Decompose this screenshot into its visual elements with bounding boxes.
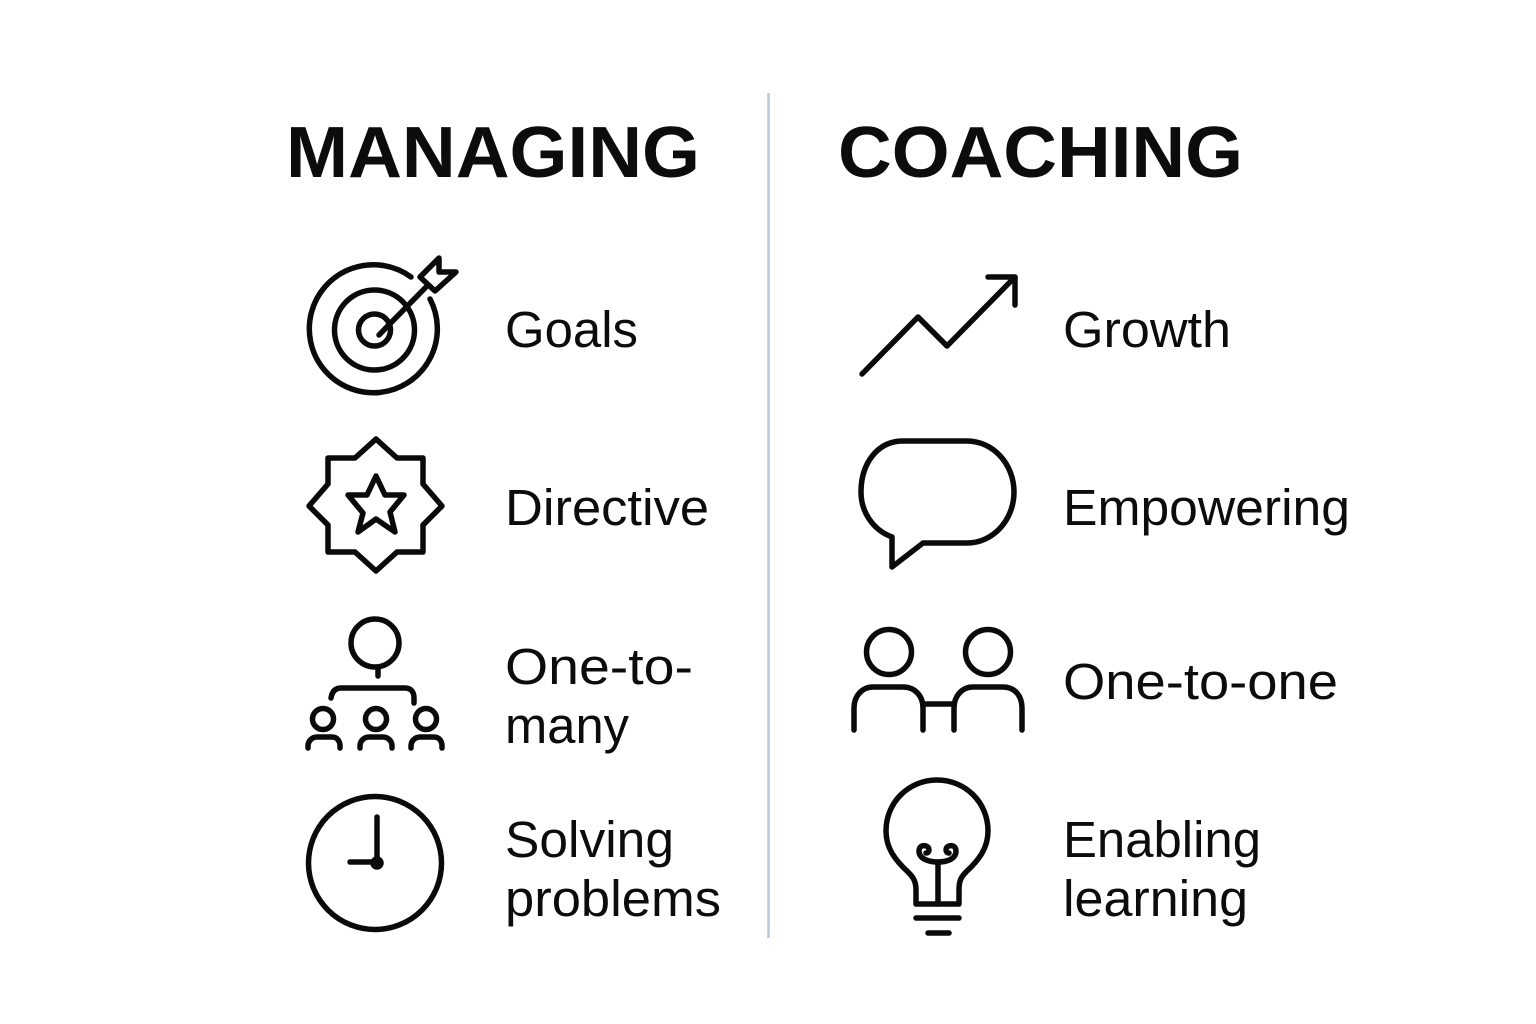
label: enabling learning: Enabling — [1063, 811, 1261, 868]
label: empowering: Empowering — [1063, 479, 1350, 536]
icon: light bulb — [886, 780, 988, 933]
panel: coaching column — [838, 113, 1350, 933]
heading: coaching: COACHING — [838, 113, 1243, 193]
label: growth: Growth — [1063, 301, 1231, 358]
label: solving problems: problems — [505, 870, 721, 927]
icon: growth arrow — [862, 277, 1015, 374]
label: goals: Goals — [505, 301, 638, 358]
icon: target with arrow — [309, 258, 456, 393]
panel: managing column — [286, 113, 721, 930]
icon: two people connected — [854, 630, 1022, 730]
label: directive: Directive — [505, 479, 709, 536]
label: one-to-many: many — [505, 697, 629, 754]
icon: one leader to many people — [308, 619, 442, 748]
label: one-to-one: One-to-one — [1063, 653, 1338, 710]
icon: speech bubble — [861, 441, 1014, 567]
label: enabling learning: learning — [1063, 870, 1248, 927]
label: solving problems: Solving — [505, 811, 674, 868]
label: enabling learning — [1063, 811, 1261, 927]
heading: managing: MANAGING — [286, 113, 700, 193]
icon: star badge — [309, 439, 442, 571]
icon: clock — [308, 796, 442, 930]
label: one-to-many: One-to- — [505, 638, 693, 695]
label: solving problems — [505, 811, 721, 927]
label: one-to-many — [505, 638, 693, 754]
